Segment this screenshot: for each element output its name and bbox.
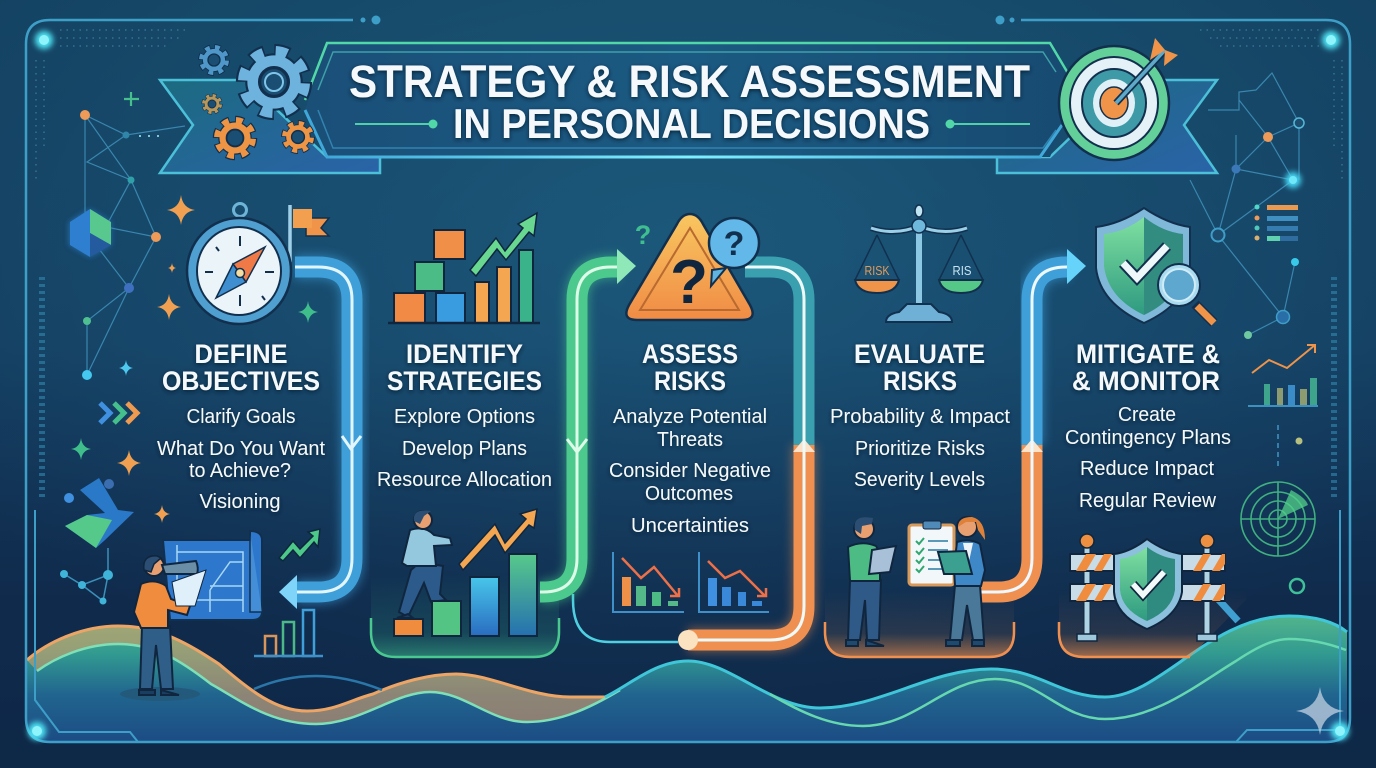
step 4 text: evaluate risks: RISKS xyxy=(883,366,957,396)
chart: decline chart left xyxy=(613,552,684,612)
step 2 text: identify strategies: STRATEGIES xyxy=(387,366,542,396)
step 3 text: assess risks: RISKS xyxy=(654,366,726,396)
sparkle decorations left xyxy=(71,92,318,523)
panel base: evaluate risks xyxy=(825,590,1014,657)
icon: watermark sparkle xyxy=(1296,687,1344,735)
icon: blueprint sheet xyxy=(163,531,262,620)
figure: woman with tablet xyxy=(938,517,985,646)
icon: balance scale xyxy=(855,205,983,322)
legend rows decoration xyxy=(1254,204,1298,240)
step 2 text: identify strategies: Explore Options xyxy=(394,406,535,428)
icon: warning triangle with question: ? xyxy=(670,248,708,317)
step 4 text: evaluate risks: Severity Levels xyxy=(854,469,985,491)
step 3 text: assess risks: Consider Negative xyxy=(609,460,771,482)
step 2 text: identify strategies: IDENTIFY xyxy=(406,339,523,369)
step 5 text: mitigate and monitor: Create xyxy=(1118,404,1176,426)
chart: decline chart right xyxy=(699,552,769,612)
icon: warning triangle with question xyxy=(626,214,759,320)
step 3 text: assess risks: Threats xyxy=(657,429,723,451)
icon: compass with flag xyxy=(187,204,329,324)
radar decoration xyxy=(1241,425,1315,593)
figure: man with tablet xyxy=(846,517,896,646)
icon: rising steps chart with arrow xyxy=(394,509,537,636)
arrow: strategies to risks (green) xyxy=(540,249,636,592)
step 4 text: evaluate risks xyxy=(830,339,1010,491)
step 5 text: mitigate and monitor: Regular Review xyxy=(1079,490,1217,512)
step 3 text: assess risks: ASSESS xyxy=(642,339,738,369)
step 4 text: evaluate risks: Probability & Impact xyxy=(830,406,1010,428)
icon: gears xyxy=(201,47,312,156)
step 1 text: define objectives: OBJECTIVES xyxy=(162,366,320,396)
step 1 text: define objectives xyxy=(157,339,325,513)
icon: building blocks and growth bars xyxy=(388,213,540,323)
icon: barrier with shield xyxy=(1070,534,1238,641)
step 4 text: evaluate risks: EVALUATE xyxy=(854,339,985,369)
icon: balance scale: RISK xyxy=(864,263,890,278)
arrow: thin return line xyxy=(573,594,678,642)
left network decoration xyxy=(80,110,185,380)
icon: balance scale: RIS xyxy=(952,263,972,278)
title line 2: IN PERSONAL DECISIONS xyxy=(453,100,930,147)
banner body xyxy=(305,43,1078,157)
step 3 text: assess risks: Outcomes xyxy=(645,483,733,505)
step 5 text: mitigate and monitor: Contingency Plans xyxy=(1065,427,1231,449)
step 1 text: define objectives: What Do You Want xyxy=(157,438,325,460)
left ribbon tail xyxy=(160,80,380,173)
panel base: identify strategies xyxy=(371,575,559,657)
icon: small bar chart xyxy=(254,610,323,656)
figure: person with spyglass xyxy=(120,556,206,701)
panel: title banner xyxy=(160,43,1217,173)
step 2 text: identify strategies xyxy=(377,339,552,491)
wave landscape at bottom xyxy=(27,616,1347,742)
title line 1: STRATEGY & RISK ASSESSMENT xyxy=(349,56,1030,107)
step 5 text: mitigate and monitor xyxy=(1065,339,1231,512)
arrow: risks to evaluate (teal to orange) xyxy=(678,267,815,650)
step 1 text: define objectives: Visioning xyxy=(200,491,280,513)
icon: warning triangle with question: ? xyxy=(724,225,744,263)
icon: hexagon cube xyxy=(69,209,111,257)
icon: shield with magnifier xyxy=(1096,208,1214,323)
title accent right xyxy=(946,120,1030,128)
step 5 text: mitigate and monitor: MITIGATE & xyxy=(1076,339,1220,369)
step 1 text: define objectives: DEFINE xyxy=(194,339,288,369)
step 4 text: evaluate risks: Prioritize Risks xyxy=(855,438,985,460)
step 2 text: identify strategies: Resource Allocation xyxy=(377,469,552,491)
mini chart top right xyxy=(1248,345,1318,406)
step 5 text: mitigate and monitor: & MONITOR xyxy=(1072,366,1220,396)
abstract shape and constellation xyxy=(60,478,134,604)
step 5 text: mitigate and monitor: Reduce Impact xyxy=(1080,458,1214,480)
step 3 text: assess risks: Uncertainties xyxy=(631,515,749,537)
step 3 text: assess risks xyxy=(609,339,771,537)
title accent left xyxy=(355,120,438,128)
step 2 text: identify strategies: Develop Plans xyxy=(402,438,527,460)
icon: target with arrow xyxy=(1059,38,1178,160)
figure: person climbing steps xyxy=(397,510,452,618)
step 3 text: assess risks: Analyze Potential xyxy=(613,406,767,428)
icon: small green up arrow xyxy=(279,529,320,561)
right network decoration xyxy=(1190,73,1304,339)
arrow: objectives to strategies (blue) xyxy=(279,267,361,609)
step 1 text: define objectives: Clarify Goals xyxy=(186,406,296,428)
icon: chevrons xyxy=(100,403,137,423)
step 1 text: define objectives: to Achieve? xyxy=(189,460,291,482)
icon: warning triangle with question: ? xyxy=(635,220,651,250)
right ribbon tail xyxy=(997,80,1217,173)
panel base: mitigate and monitor xyxy=(1059,590,1246,657)
icon: clipboard checklist xyxy=(909,521,954,585)
arrow: evaluate to mitigate (orange to blue) xyxy=(980,249,1086,592)
banner glow xyxy=(327,152,1045,162)
